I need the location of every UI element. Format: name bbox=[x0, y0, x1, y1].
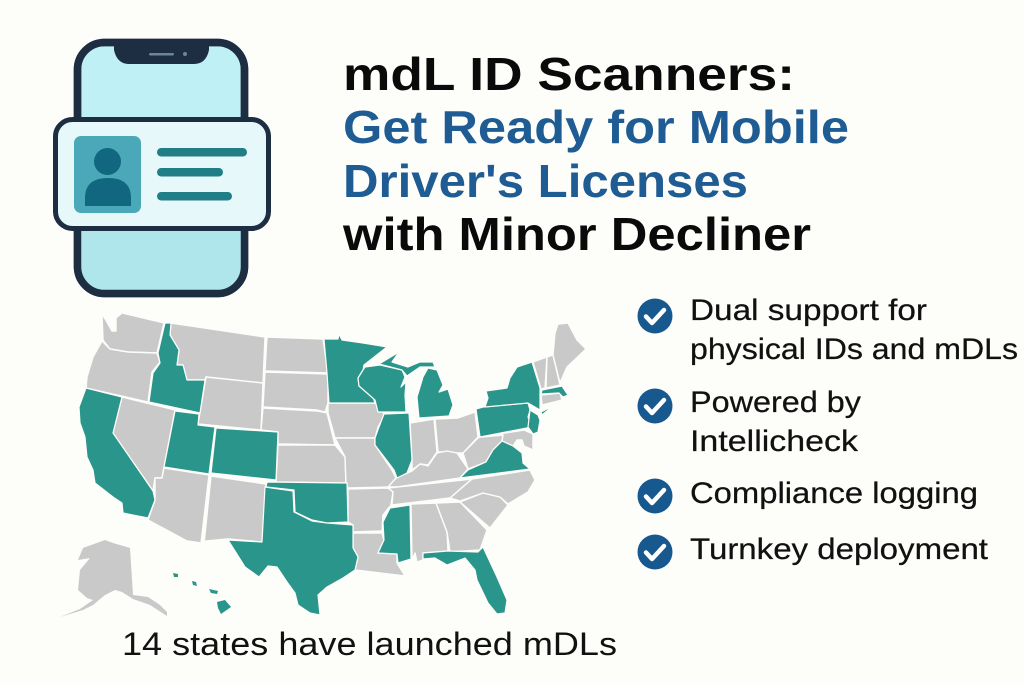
title: mdL ID Scanners: bbox=[343, 48, 795, 100]
feature: Intellicheck: Powered by bbox=[690, 386, 861, 419]
phone body bbox=[78, 42, 244, 294]
feature: dual support: physical IDs and mDLs bbox=[690, 333, 1018, 366]
map caption: 14 states have launched mDLs bbox=[122, 626, 617, 662]
feature: turnkey deployment bbox=[638, 533, 989, 570]
states without mDLs bbox=[60, 313, 586, 617]
feature: dual support bbox=[638, 294, 1018, 366]
ID photo bbox=[74, 136, 141, 213]
map: US states with mDL status bbox=[60, 313, 586, 617]
feature: turnkey deployment: Turnkey deployment bbox=[690, 533, 989, 566]
ID text lines bbox=[157, 148, 247, 200]
title bbox=[342, 48, 849, 260]
feature list bbox=[638, 294, 1018, 570]
title: with Minor Decliner bbox=[342, 208, 811, 260]
feature: dual support: Dual support for bbox=[690, 294, 927, 327]
phone notch bbox=[114, 46, 209, 64]
title: Driver's Licenses bbox=[343, 155, 748, 207]
icon: phone with digital ID card bbox=[56, 42, 268, 294]
feature: Intellicheck: Intellicheck bbox=[690, 425, 859, 458]
title: Get Ready for Mobile bbox=[343, 101, 849, 153]
feature: Intellicheck bbox=[638, 386, 861, 458]
states with launched mDLs bbox=[79, 323, 568, 615]
feature: compliance logging bbox=[638, 477, 978, 514]
ID card bbox=[56, 120, 268, 228]
feature: compliance logging: Compliance logging bbox=[690, 477, 978, 510]
